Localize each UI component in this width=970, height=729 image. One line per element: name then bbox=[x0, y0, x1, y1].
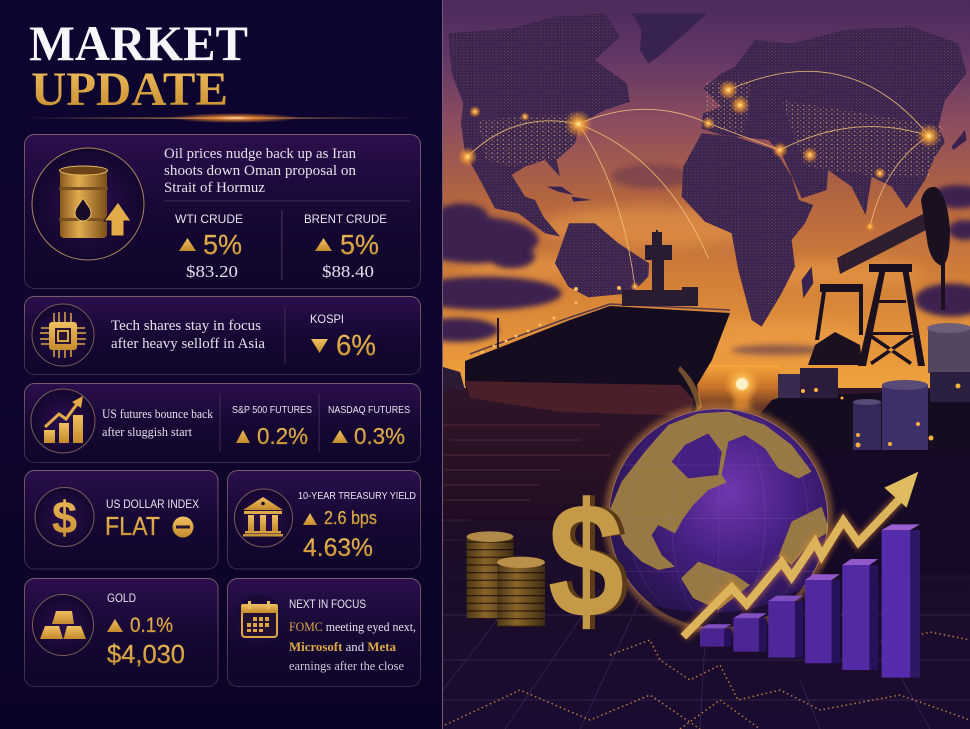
headline: oil prices: Strait of Hormuz bbox=[164, 180, 265, 196]
water bbox=[443, 388, 930, 560]
icon: dollar sign: $ bbox=[52, 492, 77, 543]
text: next in focus bbox=[289, 599, 416, 673]
coin stacks bbox=[467, 531, 545, 627]
headline: tech shares: Tech shares stay in focus bbox=[111, 318, 261, 334]
text: next in focus: earnings after the close bbox=[289, 658, 404, 673]
stat: WTI crude: WTI CRUDE bbox=[175, 212, 243, 226]
text: next in focus: FOMC meeting eyed next, bbox=[289, 619, 416, 634]
stat: gold price bbox=[107, 593, 185, 669]
panel: US futures bbox=[24, 384, 420, 462]
gold dollar sign bbox=[550, 495, 628, 630]
glowing city hubs bbox=[458, 80, 941, 291]
rising gold arrow bbox=[683, 472, 918, 637]
stat: WTI crude: $83.20 bbox=[186, 262, 238, 281]
stat: KOSPI: KOSPI bbox=[310, 312, 344, 326]
oil pumpjack and derrick bbox=[808, 187, 950, 366]
headline: US futures: US futures bounce back bbox=[102, 407, 214, 421]
purple 3D bar chart bbox=[700, 524, 920, 678]
stat: Brent crude bbox=[304, 212, 387, 281]
stat: dollar flat bbox=[105, 499, 199, 541]
title: MARKET UPDATE: UPDATE bbox=[31, 63, 228, 116]
stat: S&P 500 futures: 0.2% bbox=[257, 423, 308, 449]
headline: oil prices: Oil prices nudge back up as Iran bbox=[164, 146, 356, 162]
oil tanker ship bbox=[465, 230, 730, 416]
panel: oil prices bbox=[24, 134, 420, 288]
stat: Brent crude: $88.40 bbox=[322, 262, 374, 281]
stat: dollar flat: US DOLLAR INDEX bbox=[106, 499, 199, 511]
stat: gold price: GOLD bbox=[107, 593, 136, 605]
headline: tech shares: after heavy selloff in Asia bbox=[111, 336, 265, 352]
panel: hero illustration bbox=[408, 0, 970, 729]
stat: WTI crude: 5% bbox=[203, 229, 242, 260]
stat: treasury yield: 10-YEAR TREASURY YIELD bbox=[298, 490, 416, 502]
stat: dollar flat: FLAT bbox=[105, 511, 160, 541]
icon: dollar sign bbox=[35, 488, 94, 546]
stat: gold price: $4,030 bbox=[107, 639, 185, 669]
stat: gold price: 0.1% bbox=[130, 614, 173, 637]
gold dollar sign: $ bbox=[553, 470, 629, 653]
stat: S&P 500 futures bbox=[232, 404, 312, 449]
trade route arcs bbox=[468, 71, 929, 287]
icon: calendar bbox=[234, 595, 284, 645]
headline: oil prices bbox=[164, 146, 356, 196]
icon: rising bar chart bbox=[31, 389, 95, 453]
sun on the horizon bbox=[695, 365, 780, 417]
panel: left column background bbox=[0, 0, 443, 729]
stat: WTI crude bbox=[175, 212, 243, 281]
stat: Nasdaq futures bbox=[328, 404, 410, 449]
title: MARKET UPDATE: MARKET bbox=[29, 15, 248, 71]
globe bbox=[604, 404, 833, 633]
panel: US dollar index bbox=[24, 470, 218, 569]
title: MARKET UPDATE bbox=[29, 15, 248, 116]
stat: Nasdaq futures: 0.3% bbox=[354, 423, 405, 449]
panel: 10-year treasury yield bbox=[228, 470, 420, 569]
distant headland bbox=[443, 367, 465, 390]
icon: gold bars bbox=[32, 594, 94, 656]
headline: US futures bbox=[102, 407, 214, 439]
panel: next in focus bbox=[228, 578, 420, 686]
panel: gold bbox=[24, 578, 218, 686]
stat: KOSPI bbox=[310, 312, 376, 362]
headline: oil prices: shoots down Oman proposal on bbox=[164, 163, 356, 179]
stat: treasury yield: 4.63% bbox=[303, 534, 373, 562]
text: next in focus: NEXT IN FOCUS bbox=[289, 599, 366, 611]
stat: S&P 500 futures: S&P 500 FUTURES bbox=[232, 404, 312, 416]
headline: US futures: after sluggish start bbox=[102, 425, 193, 439]
stat: Nasdaq futures: NASDAQ FUTURES bbox=[328, 404, 410, 416]
sunset clouds bbox=[408, 165, 970, 360]
water ripples bbox=[443, 425, 610, 540]
icon: oil barrel with up arrow bbox=[32, 148, 144, 260]
reflective floor with dotted map bbox=[443, 450, 970, 729]
icon: microchip bbox=[32, 304, 94, 366]
headline: tech shares bbox=[111, 318, 265, 352]
stat: Brent crude: 5% bbox=[340, 229, 379, 260]
stat: treasury yield: 2.6 bps bbox=[324, 508, 377, 528]
stat: treasury yield bbox=[298, 490, 416, 562]
stat: Brent crude: BRENT CRUDE bbox=[304, 212, 387, 226]
world map with city lights bbox=[448, 13, 967, 327]
panel: tech shares bbox=[24, 296, 420, 374]
text: next in focus: Microsoft and Meta bbox=[289, 639, 396, 654]
icon: bank building bbox=[234, 489, 292, 547]
storage tanks and refinery dock bbox=[760, 323, 970, 450]
gold dollar sign: $ bbox=[548, 470, 624, 653]
glowing divider under title bbox=[25, 113, 417, 123]
stat: KOSPI: 6% bbox=[336, 330, 376, 362]
